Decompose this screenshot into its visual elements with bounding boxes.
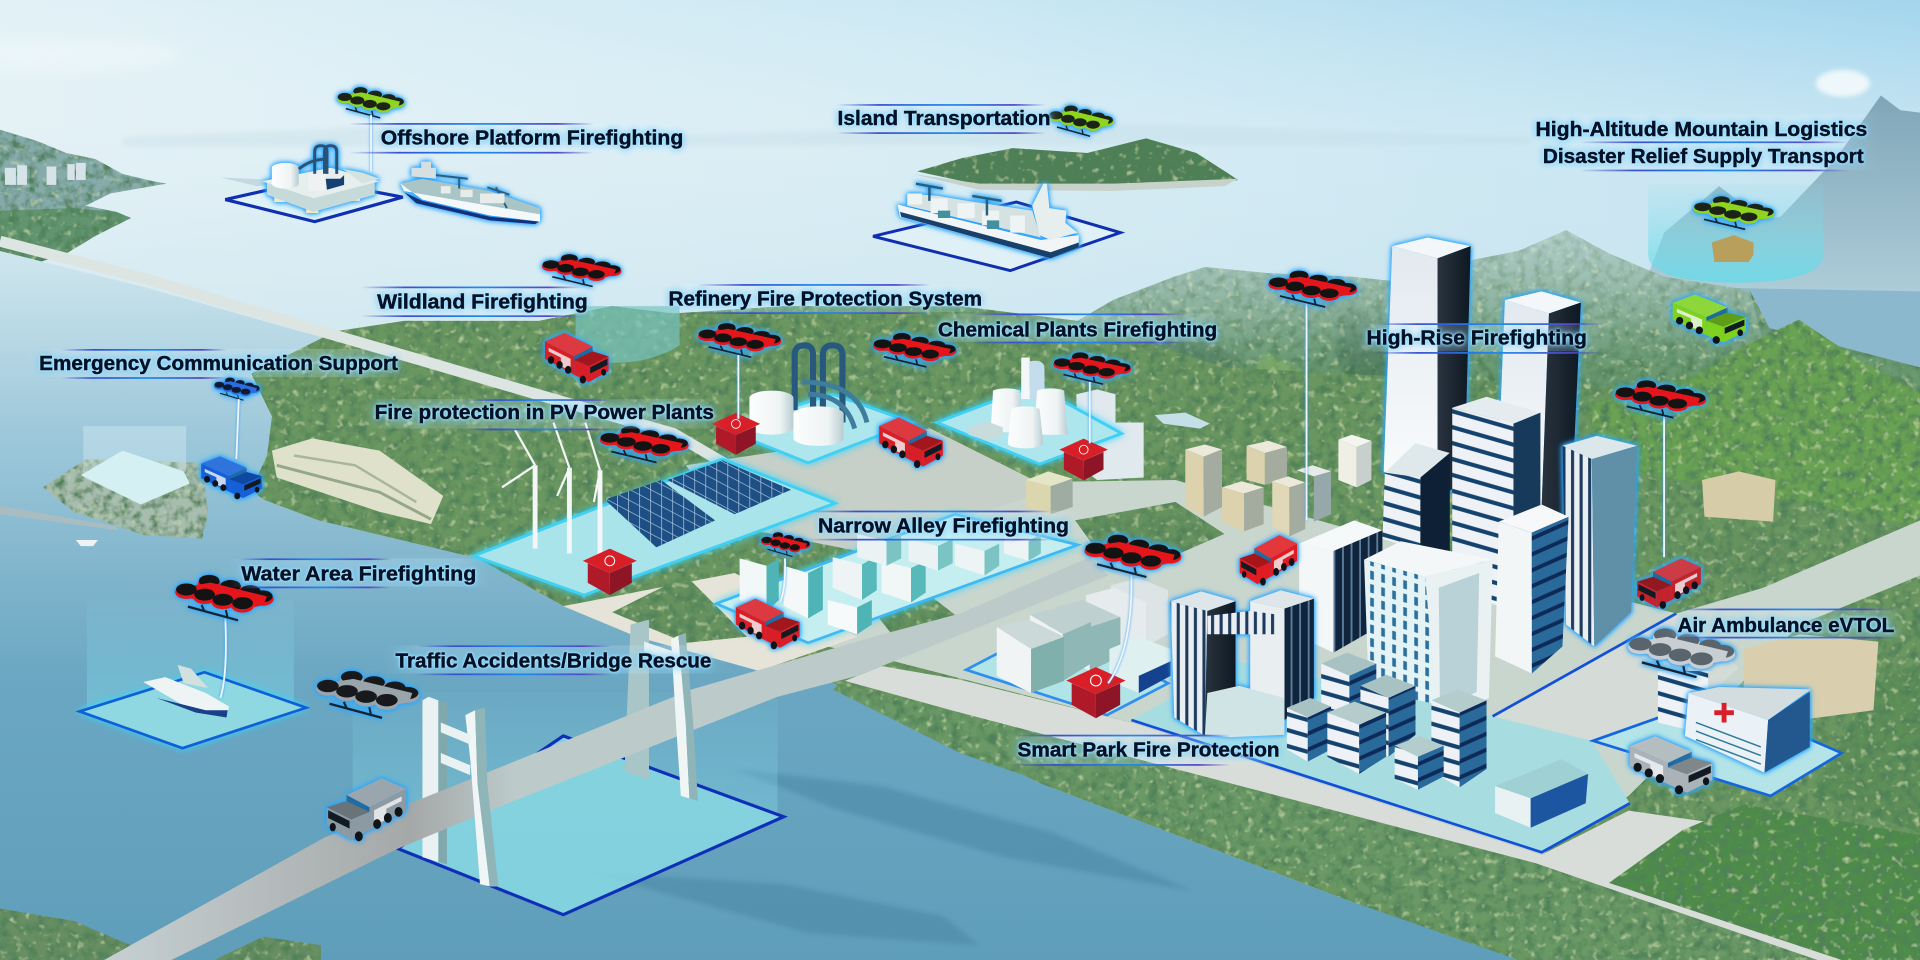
mountain lake, right [1714, 288, 1920, 367]
riverside road [845, 666, 1920, 960]
cargo box [1712, 235, 1753, 262]
red drone [1053, 352, 1131, 384]
tall tower 1 [1384, 238, 1471, 502]
red drone [1085, 535, 1181, 577]
pipes [795, 345, 867, 429]
panel: wildland firefighting [542, 254, 680, 384]
label: island transportation: Island Transportation [838, 108, 1051, 130]
label: PV plants: Fire protection in PV Power Plants [375, 402, 714, 424]
tower B [1247, 441, 1287, 485]
white tower [1299, 520, 1382, 653]
label: mountain logistics [1523, 114, 1880, 171]
storage tanks [749, 391, 844, 446]
red truck [545, 333, 609, 384]
river and bay water [0, 251, 1518, 960]
riverside tree strip [833, 686, 1817, 960]
right mountain [1592, 320, 1920, 527]
ship [143, 665, 229, 718]
drone: green [337, 87, 405, 118]
red truck [1637, 558, 1701, 609]
label: air ambulance [1665, 609, 1907, 638]
label: high-rise [1354, 323, 1604, 354]
bridge deck [104, 557, 1108, 960]
label: smart park: Smart Park Fire Protection [1018, 740, 1280, 762]
solar panels [605, 460, 791, 547]
platform [474, 459, 835, 595]
building behind [1076, 389, 1144, 480]
towers behind hospital [1744, 634, 1878, 720]
offshore rig [262, 146, 380, 213]
red box [1059, 439, 1108, 480]
red box [1066, 667, 1126, 718]
city ground [563, 429, 1920, 855]
base diamond [80, 672, 306, 748]
black drone [316, 671, 419, 718]
panel: high-altitude logistics [1648, 184, 1823, 344]
tether [737, 355, 739, 419]
glass tower right [1562, 436, 1637, 647]
left platform [966, 624, 1168, 715]
panel: narrow alley firefighting [716, 514, 1078, 649]
tether [1306, 301, 1308, 520]
tan city buildings [1026, 435, 1878, 720]
towers near right road [1702, 471, 1776, 522]
label: wildland [361, 287, 600, 317]
white tower F [1338, 435, 1371, 487]
main land [251, 306, 1920, 960]
headland with city, top left [0, 130, 167, 269]
tether [1089, 382, 1091, 443]
red truck [879, 418, 943, 468]
window twin block [1364, 541, 1493, 722]
red truck [1240, 535, 1297, 586]
white block houses [740, 534, 1041, 634]
twin towers with sky bridge [1171, 590, 1314, 737]
mountain shading [1127, 306, 1445, 430]
red drone [761, 532, 810, 557]
drone: green [1048, 105, 1114, 136]
label: chemical plants: Chemical Plants Firefighting [938, 320, 1217, 342]
tether [1663, 414, 1665, 557]
platform [1593, 698, 1842, 796]
label: narrow alley: Narrow Alley Firefighting [818, 516, 1069, 538]
forest behind hospital [1812, 661, 1920, 833]
blue drone [214, 377, 260, 400]
drone with cargo [1693, 196, 1774, 229]
translucent cylinder [576, 306, 680, 363]
platform [722, 394, 912, 463]
tower C [1222, 481, 1264, 531]
panel: air ambulance eVTOL [1593, 628, 1842, 796]
campus buildings [272, 438, 443, 524]
plaza [1493, 613, 1739, 759]
white eVTOL drone [1628, 628, 1735, 677]
label: refinery [656, 284, 994, 314]
translucent beam [83, 426, 186, 504]
panel: high-rise firefighting [1240, 238, 1706, 722]
label: traffic accidents: Traffic Accidents/Bridge Rescue [396, 650, 711, 672]
red drone [175, 575, 274, 620]
tether [1108, 576, 1131, 683]
grey rescue truck [327, 778, 406, 841]
red drone [1268, 271, 1357, 307]
label: chemical plants [926, 313, 1229, 343]
red drone [542, 254, 621, 287]
label: narrow alley [806, 511, 1081, 540]
panel: island transportation [873, 105, 1120, 271]
panel: offshore platform firefighting [225, 87, 540, 224]
peninsula [0, 459, 208, 546]
platform [716, 514, 1078, 643]
label: wildland: Wildland Firefighting [377, 292, 588, 314]
platform edges [1131, 613, 1676, 852]
label: smart park [1005, 735, 1292, 766]
green mountain range [1078, 230, 1920, 539]
panel: smart park fire protection [966, 535, 1676, 852]
tower D [1272, 476, 1305, 536]
translucent beam [353, 692, 778, 849]
rear tower legs [422, 620, 649, 864]
small dark tower [1382, 443, 1450, 551]
far-left bridge and highway [0, 241, 857, 539]
red drone [1615, 380, 1706, 418]
label: emergency communication: Emergency Communication Support [39, 353, 398, 375]
base diamond [225, 180, 403, 222]
translucent cylinder [1648, 184, 1823, 283]
low teal block [1495, 759, 1588, 828]
water shadows [588, 769, 1194, 945]
mountain haze [1078, 230, 1769, 367]
panel: water area firefighting [80, 575, 306, 748]
ship [400, 162, 540, 224]
red box [712, 413, 760, 455]
red drone [873, 333, 956, 367]
front tower legs and crossbars [441, 633, 698, 887]
label: emergency communication [27, 349, 410, 379]
cargo ship [898, 184, 1079, 258]
base diamond [398, 736, 784, 915]
tether [220, 618, 226, 698]
tower A [1185, 444, 1222, 517]
label: high-rise: High-Rise Firefighting [1367, 328, 1587, 350]
label: water area [229, 558, 489, 588]
white striped tower [1495, 504, 1569, 673]
label: water area: Water Area Firefighting [241, 563, 476, 585]
panel: emergency communication [81, 377, 262, 504]
background: sky and distant sea [0, 0, 1920, 514]
wind turbines [502, 422, 600, 561]
label: island transportation [825, 104, 1063, 134]
base diamond [873, 202, 1120, 271]
panel: chemical plants firefighting [937, 352, 1144, 480]
cooling towers [969, 358, 1068, 448]
distant mountain peak, top right [1641, 96, 1920, 321]
tower H [1026, 471, 1073, 514]
tall tower 2 [1496, 291, 1581, 539]
striped mid tower [1452, 397, 1540, 612]
tether [370, 115, 372, 171]
label: mountain logistics: Disaster Relief Supply Transport [1543, 146, 1864, 168]
label: traffic accidents [383, 645, 724, 675]
white tower E [1297, 465, 1331, 522]
small striped buildings [1287, 653, 1487, 790]
tether [780, 558, 785, 602]
green truck [1673, 294, 1746, 344]
label: PV plants [362, 399, 726, 430]
red box [583, 549, 637, 595]
label: offshore platform [349, 123, 698, 154]
label: mountain logistics: High-Altitude Mountain Logistics [1536, 119, 1867, 141]
hospital [1685, 687, 1811, 773]
forest, lower right [1609, 804, 1920, 960]
panel: PV power plants [474, 422, 835, 595]
blue truck [201, 456, 262, 499]
trees, bottom left [0, 909, 321, 960]
large platform [1131, 661, 1630, 852]
silver truck [1630, 736, 1712, 794]
red drone [600, 426, 689, 462]
far island [912, 138, 1238, 191]
block row [997, 578, 1171, 693]
red drone [698, 323, 781, 357]
mountain ponds [1155, 413, 1210, 429]
panel: traffic accidents and bridge rescue [104, 557, 1108, 960]
city tree patches [612, 502, 1805, 643]
light beam [87, 600, 294, 710]
label: air ambulance: Air Ambulance eVTOL [1678, 615, 1894, 637]
label: offshore platform: Offshore Platform Firefighting [381, 127, 683, 149]
rear hospital wing [1658, 671, 1708, 735]
white buildings [81, 451, 190, 504]
panel: refinery fire protection [698, 323, 956, 468]
platform [937, 386, 1122, 464]
red truck [736, 599, 800, 649]
label: refinery: Refinery Fire Protection System [669, 289, 982, 311]
tether [236, 399, 239, 459]
